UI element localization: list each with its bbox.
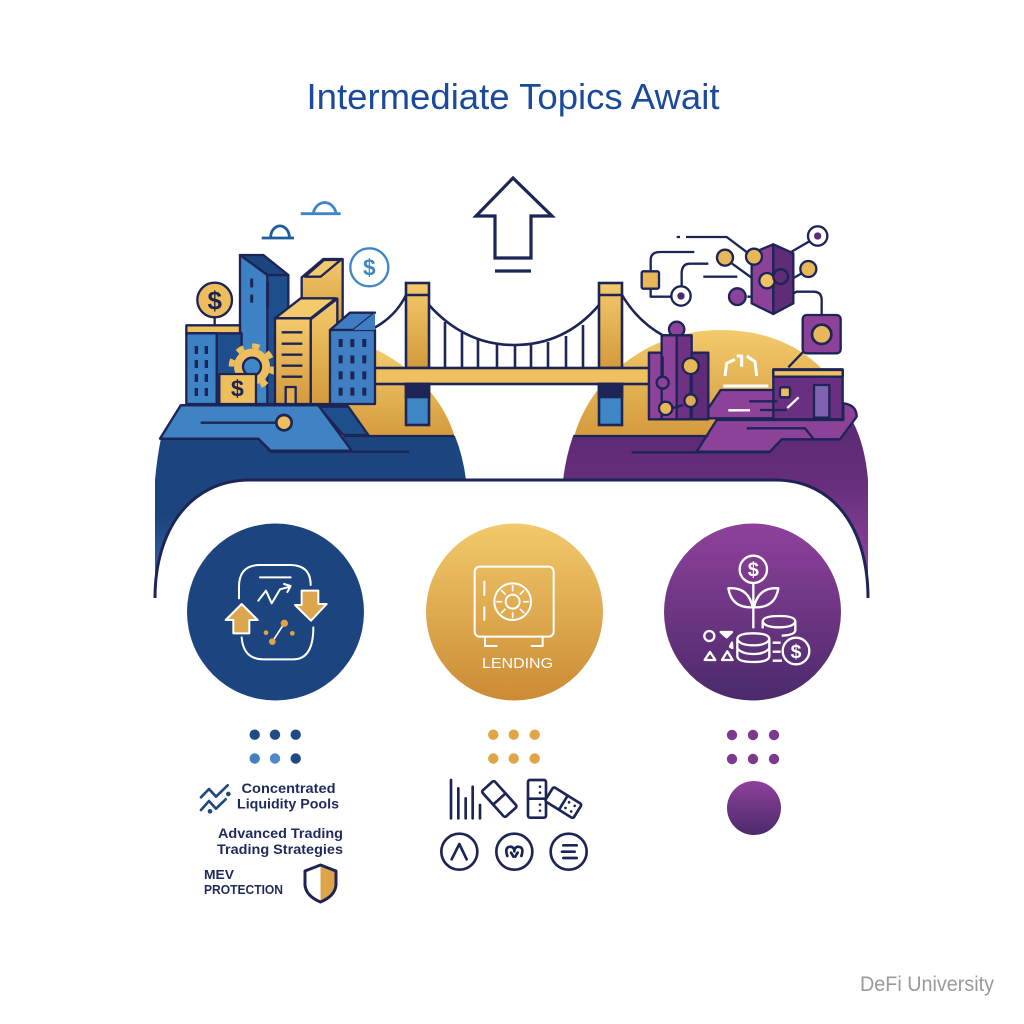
dots: gold — [488, 730, 540, 764]
panel: gold dome behind left city — [340, 350, 455, 438]
panel: trading circle — [187, 524, 364, 700]
icon: upward arrow — [476, 178, 552, 271]
purple ground platform — [573, 403, 857, 452]
panel: purple foundation — [563, 422, 868, 598]
text: concentrated liquidity pools: Concentrated — [242, 781, 336, 796]
text: mev protection — [204, 867, 283, 897]
dots: purple — [727, 730, 779, 764]
platform: blue ground with connector — [160, 405, 454, 452]
title: Intermediate Topics Await — [306, 76, 720, 117]
right crypto city illustration — [573, 226, 857, 452]
text: mev protection: PROTECTION — [204, 883, 283, 897]
dots: blue — [250, 730, 301, 764]
text: concentrated liquidity pools — [237, 781, 339, 812]
icon: purple circle — [727, 781, 781, 835]
icon: gear — [231, 346, 273, 387]
icon: gold coin on post: $ — [207, 285, 222, 315]
purple square with gold coin — [803, 315, 841, 353]
building: front gold tower — [275, 298, 337, 404]
icon: dollar circle outline: $ — [363, 254, 376, 280]
icon: gold box with dollar — [219, 374, 256, 404]
rounded arch outline — [155, 480, 868, 598]
icons: three token logos — [441, 834, 587, 870]
text: concentrated liquidity pools: Liquidity Pools — [237, 796, 339, 812]
purple vehicle block — [708, 387, 799, 418]
text: mev protection: MEV — [204, 867, 234, 882]
panel: blue foundation — [155, 436, 466, 598]
footer: brand: DeFi University — [860, 973, 994, 996]
network wires — [651, 237, 822, 367]
text: advanced trading strategies: Advanced Trading — [218, 826, 343, 841]
icon: small cloud light — [301, 203, 341, 214]
icon: trading arrows and chart — [226, 565, 327, 659]
icon: gold box with dollar: $ — [231, 376, 244, 402]
icon: dollar circle outline — [350, 248, 388, 286]
label: lending: LENDING — [482, 656, 553, 672]
panel: yield circle — [664, 524, 841, 700]
building: low blue block with roof — [186, 325, 242, 404]
icon: small cloud dark — [262, 226, 294, 238]
icon: money plant and coins — [704, 556, 809, 664]
building: front blue block — [330, 313, 375, 404]
icon: liquidity waves — [201, 785, 229, 812]
purple tower — [649, 322, 708, 419]
panel: gold dome behind right city — [574, 330, 850, 437]
icon: vault safe — [475, 567, 554, 646]
purple low building — [773, 369, 843, 419]
text: advanced trading strategies — [217, 826, 343, 857]
building: tall blue tower — [240, 255, 288, 404]
chain hexagon block — [752, 244, 793, 314]
text: advanced trading strategies: Trading Strategies — [217, 842, 343, 857]
white glyph on gold dome — [723, 356, 768, 386]
icon: money plant and coins: $ — [791, 642, 802, 663]
icons: bars and dominoes — [451, 780, 582, 819]
panel: lending circle — [426, 524, 603, 700]
building: back gold tower — [302, 259, 343, 327]
suspension bridge — [374, 283, 664, 425]
icon: money plant and coins: $ — [748, 560, 759, 582]
icon: shield — [305, 865, 336, 902]
network nodes — [642, 226, 827, 306]
left city illustration — [160, 203, 454, 452]
icon: gold coin on post — [197, 283, 232, 325]
